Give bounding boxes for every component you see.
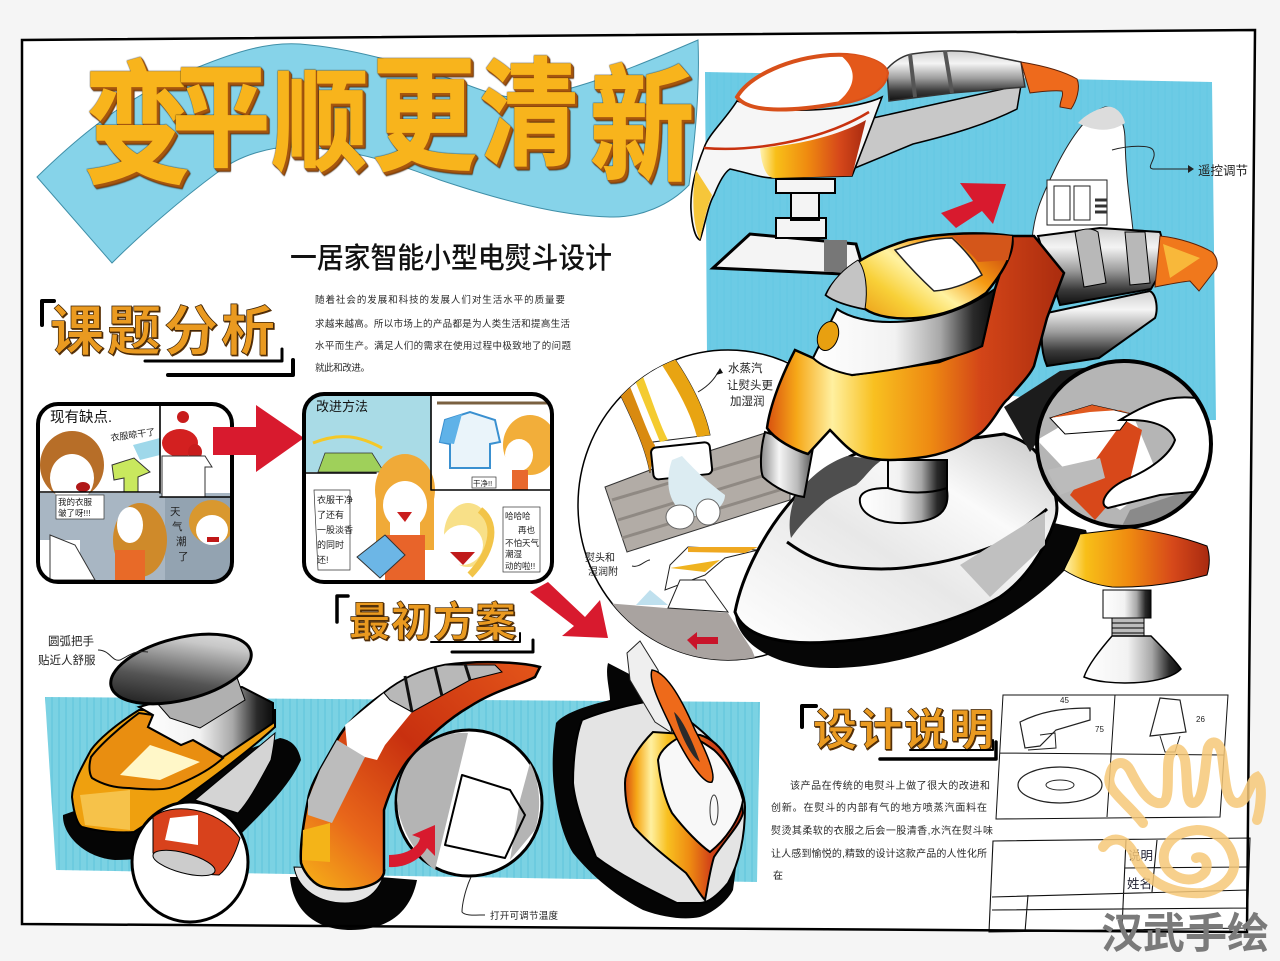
technical drawings box: 45 [1060,696,1069,705]
text block: intro paragraph: 水平而生产。满足人们的需求在使用过程中极致地了的问题 [315,340,571,352]
lower iron 1 [63,622,301,922]
title block table: 说明 [1128,848,1153,863]
title: 变 [84,53,190,201]
black shadow [63,738,301,860]
panel: blue background upper right [705,72,1216,420]
sole [735,434,1057,643]
title: 更 [372,48,476,187]
lower cylinder [1042,291,1157,366]
comic: current shortcomings [38,404,235,585]
lower orange body [767,236,1064,460]
title ribbon [37,40,698,263]
sole [573,700,745,903]
text block: design description: 让人感到愉悦的,精致的设计这款产品的人性化所 [771,847,987,860]
orange hook [1155,236,1217,291]
comic: improvement method: 衣服干净 [317,494,353,505]
arrow: comic to comic [213,405,304,472]
comic: improvement method: 的同时 [317,539,344,550]
callout: remote control [1112,146,1248,178]
lower grey handle [855,85,1021,168]
callout: steam: 加湿润 [730,394,764,408]
title: 新 [590,58,694,197]
lower iron 3 [553,641,745,918]
technical drawings box: 26 [1196,715,1205,724]
curved body [301,662,540,889]
title block table [989,838,1250,932]
comic: current shortcomings: 气 [172,520,183,533]
comic: improvement method: 干净!! [473,478,492,488]
detail circle: hand on handle [1037,361,1215,530]
title: 顺 [272,61,368,184]
callout: round handle [38,634,148,667]
text block: design description: 熨烫其柔软的衣服之后会一股清香,水汽在熨斗味 [771,824,993,837]
cap [104,622,258,716]
technical drawings box [996,695,1228,819]
shadow [553,663,745,918]
title: 平 [172,56,270,182]
comic: current shortcomings: 我的衣服 [58,497,93,507]
grey lower right [195,733,275,813]
arrow: upper red [941,183,1006,228]
title block table: 姓名 [1127,876,1152,891]
white egg [658,735,743,852]
comic: improvement method [304,394,557,582]
body [691,97,882,240]
stem [776,179,835,238]
watermark text: 汉武手绘 [1101,910,1269,957]
text block: design description: 该产品在传统的电熨斗上做了很大的改进和 [790,779,990,792]
arrow: diagonal red [530,582,608,638]
comic: current shortcomings: 衣服晾干了 [110,426,156,443]
comic: improvement method: 了还有 [317,509,344,520]
panel: blue background lower [45,697,760,882]
barrel [887,51,1025,101]
text block: intro paragraph [315,294,571,374]
detail circle: adjuster [396,730,542,876]
comic: improvement method: 再也 [518,525,536,535]
top cap [826,233,1013,319]
main iron [735,228,1217,668]
callout: round handle: 贴近人舒服 [38,653,96,667]
back view with control panel [1032,107,1134,240]
arrow: adjuster [389,825,435,867]
heading: design description: 设计说明 [813,706,995,755]
comic: improvement method: 改进方法 [316,399,368,414]
watermark logo [1103,742,1261,893]
side view lower right [1064,528,1209,683]
heading: initial scheme: 最初方案 [349,599,517,645]
comic: current shortcomings: 潮 [176,535,186,548]
title: 清 [480,50,578,180]
callout: steam: 让熨头更 [727,378,773,392]
orange hook [1021,62,1078,109]
neck [150,672,245,728]
detail circle: steam iron on board [577,349,790,661]
front skirt [761,432,813,497]
black shadow under sole [735,520,1087,668]
orange shell [625,732,743,900]
comic: current shortcomings: 了 [178,551,188,563]
sole base [713,234,865,275]
comic: improvement method: 哈哈哈 [505,511,531,521]
subtitle: 一居家智能小型电熨斗设计 [290,242,612,275]
comic: improvement method: 还! [317,554,329,565]
comic: improvement method: 不怕天气 [505,538,540,548]
base [290,877,417,930]
upper white band [813,289,995,375]
text block: intro paragraph: 求越来越高。所以市场上的产品都是为人类生活和提高生活 [315,318,570,330]
black textured connector [1004,367,1090,452]
callout: remote control: 遥控调节 [1198,164,1248,178]
cap [737,55,887,110]
barrel [1038,228,1168,305]
comic: current shortcomings: 皱了呀!!! [58,508,91,518]
title [84,48,694,201]
comic: current shortcomings: 天 [170,506,181,518]
inner top [89,713,223,789]
text block: intro paragraph: 随着社会的发展和科技的发展人们对生活水平的质量要 [315,294,565,306]
lower iron 2 [290,662,540,930]
comic: improvement method: 动的啦!! [505,561,535,571]
comic: current shortcomings: 现有缺点. [50,409,112,426]
comic: improvement method: 一股淡香 [317,525,353,535]
callout: steam [698,361,773,408]
callout: steam holes: 熨头和 [585,551,615,564]
text block: design description: 在。 [773,870,785,882]
callout: adjust temperature: 打开可调节温度 [490,910,558,922]
callout: steam holes: 湿润附 [588,565,618,578]
text block: intro paragraph: 就此和改进。 [315,362,370,374]
upper sketch: iron side view [691,51,1078,275]
stepped plate [139,687,273,757]
stem [860,460,948,523]
circle detail [132,802,248,922]
orange body [72,710,275,832]
text block: design description: 创新。在熨斗的内部有气的地方喷蒸汽面料在 [771,801,987,814]
heading: project analysis: 课题分析 [50,302,278,362]
callout: round handle: 圆弧把手 [48,634,94,648]
technical drawings box: 75 [1095,725,1104,734]
handle [627,641,672,733]
callout: adjust temperature [462,877,558,922]
callout: steam: 水蒸汽 [728,361,763,375]
text block: design description [771,779,993,882]
callout: steam holes [585,551,650,578]
comic: improvement method: 潮湿 [505,549,523,559]
